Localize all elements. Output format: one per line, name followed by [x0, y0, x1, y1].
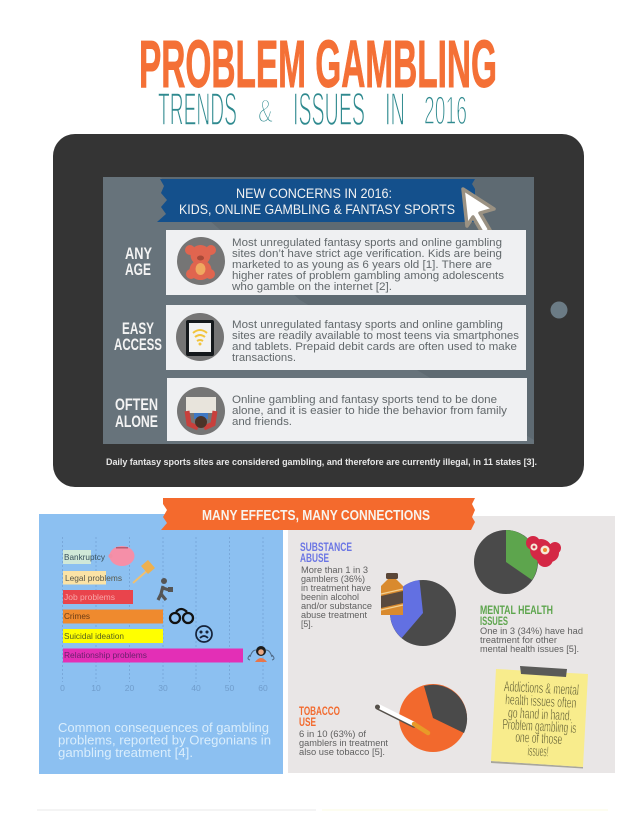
substance abuse block: abuse treatment	[301, 610, 367, 620]
note text: health issues often	[505, 692, 577, 712]
banner: new concerns	[157, 179, 475, 222]
note text: Addictions & mental	[503, 679, 579, 699]
mental health block	[480, 605, 583, 654]
note text: one of those	[515, 730, 563, 748]
panel: connections	[288, 516, 615, 773]
bar: suicidal ideation: Suicidal ideation	[64, 631, 124, 641]
substance abuse block	[300, 542, 372, 629]
substance abuse block: ABUSE	[300, 553, 329, 565]
row: easy access: EASY	[122, 319, 154, 338]
banner: new concerns: NEW CONCERNS IN 2016:	[236, 185, 392, 201]
bar: bankruptcy: Bankruptcy	[64, 552, 106, 562]
subtitle	[158, 83, 467, 135]
chart axis labels: 0	[60, 683, 65, 693]
bar: job problems	[63, 590, 133, 604]
substance abuse block: More than 1 in 3	[301, 565, 368, 575]
chart caption: gambling treatment [4].	[58, 746, 193, 760]
chart caption: Common consequences of gambling	[58, 721, 269, 735]
icon: bottle	[381, 573, 403, 615]
substance abuse block: gamblers (36%)	[301, 574, 365, 584]
chart caption	[58, 721, 271, 760]
mental health block: mental health issues [5].	[480, 644, 579, 654]
row: any age: Most unregulated fantasy sports and online gambling	[232, 237, 502, 249]
row: any age: ANY	[125, 244, 152, 263]
row: often alone: Online gambling and fantasy sports tend to be done	[232, 394, 497, 406]
icon: person carrying box	[158, 578, 173, 600]
tobacco use block: 6 in 10 (63%) of	[299, 729, 367, 739]
chart caption: problems, reported by Oregonians in	[58, 734, 271, 748]
mental health block: ISSUES	[480, 616, 508, 628]
tobacco use block	[299, 706, 389, 757]
substance abuse block: and/or substance	[301, 601, 372, 611]
row: easy access	[114, 305, 526, 370]
row: any age	[125, 230, 526, 295]
banner: many effects	[161, 498, 475, 530]
icon: sad face	[196, 626, 212, 642]
bar: legal problems: Legal problems	[65, 573, 122, 583]
row: any age: marketed to as young as 6 years old [1]. There are	[232, 259, 492, 271]
bar: bankruptcy	[63, 550, 106, 564]
icon: person alone at laptop	[177, 387, 225, 435]
row: easy access: and tablets. Prepaid debit cards are often used to make	[232, 341, 517, 353]
pie: substance abuse	[390, 580, 456, 646]
row: easy access: Most unregulated fantasy sports and online gambling	[232, 319, 503, 331]
substance abuse block: in treatment have	[301, 583, 371, 593]
tablet home button	[550, 302, 568, 318]
subtitle: IN	[385, 83, 405, 135]
substance abuse block: SUBSTANCE	[300, 542, 352, 554]
pie: tobacco use	[399, 684, 467, 752]
pie: mental health	[474, 530, 538, 594]
panel: consequences chart	[39, 514, 283, 774]
subtitle: &	[258, 93, 273, 129]
row: often alone: ALONE	[115, 412, 158, 431]
text: 2016	[424, 89, 467, 133]
subtitle: ISSUES	[293, 83, 365, 135]
row: any age: higher rates of problem gambling among adolescents	[232, 270, 505, 282]
icon: piggy bank	[108, 546, 134, 566]
icon: cigarette	[375, 704, 428, 733]
subtitle: TRENDS	[158, 83, 237, 135]
panel: tablet	[53, 134, 584, 487]
tobacco use block: USE	[299, 717, 316, 729]
bar: suicidal ideation	[63, 629, 163, 643]
row: often alone: alone, and it is easier to hide the behavior from family	[232, 405, 508, 417]
row: any age: AGE	[125, 260, 151, 279]
substance abuse block: [5].	[301, 619, 313, 629]
note text	[500, 679, 579, 762]
bar: job problems: Job problems	[64, 592, 115, 602]
tobacco use block: also use tobacco [5].	[299, 747, 385, 757]
icon: teddy bear	[177, 237, 225, 285]
row: any age: sites don’t have strict age verification. Kids are being	[232, 248, 502, 260]
chart axis labels: 60	[258, 683, 268, 693]
sticky note	[491, 666, 588, 768]
icon: cursor arrow	[463, 189, 494, 234]
chart axis labels: 20	[125, 683, 134, 693]
note text: Problem gambling is	[502, 717, 577, 737]
substance abuse block: beenin alcohol	[301, 592, 359, 602]
next page edge	[37, 809, 608, 811]
row: easy access: ACCESS	[114, 335, 162, 354]
mental health block: One in 3 (34%) have had	[480, 626, 583, 636]
bar chart	[60, 537, 268, 693]
bar: crimes: Crimes	[64, 611, 90, 621]
icon: handcuffs	[170, 609, 193, 623]
icon: flowers	[526, 536, 561, 567]
banner: many effects: MANY EFFECTS, MANY CONNECTIONS	[202, 508, 430, 524]
note text: issues!	[527, 743, 549, 760]
chart axis labels: 50	[225, 683, 234, 693]
row: often alone: and friends.	[232, 416, 292, 428]
bar: crimes	[63, 610, 163, 624]
chart axis labels	[60, 683, 268, 693]
chart axis labels: 30	[158, 683, 168, 693]
mental health block: MENTAL HEALTH	[480, 605, 553, 617]
row: often alone	[115, 378, 527, 441]
tablet footer note: Daily fantasy sports sites are considered gambling, and therefore are currently illegal, in 11 states [3].	[106, 457, 537, 467]
bar: relationship problems	[63, 648, 243, 662]
icon: distressed woman	[248, 646, 274, 662]
row: easy access: transactions.	[232, 352, 296, 364]
chart axis labels: 10	[91, 683, 101, 693]
icon: tablet with wifi	[176, 313, 224, 361]
chart axis labels: 40	[191, 683, 201, 693]
tobacco use block: TOBACCO	[299, 706, 340, 718]
row: any age: who gamble on the internet [2].	[231, 281, 392, 293]
bar: relationship problems: Relationship problems	[64, 650, 147, 660]
row: easy access: sites are readily available to most teens via smartphones	[232, 330, 520, 342]
tablet screen	[103, 177, 534, 444]
mental health block: treatment for other	[480, 635, 557, 645]
row: often alone: OFTEN	[115, 395, 158, 414]
icon: gavel	[133, 560, 155, 583]
note tape	[520, 666, 567, 677]
note text: go hand in hand.	[508, 705, 572, 725]
banner: new concerns: KIDS, ONLINE GAMBLING & FANTASY SPORTS	[179, 201, 455, 217]
tobacco use block: gamblers in treatment	[299, 738, 389, 748]
